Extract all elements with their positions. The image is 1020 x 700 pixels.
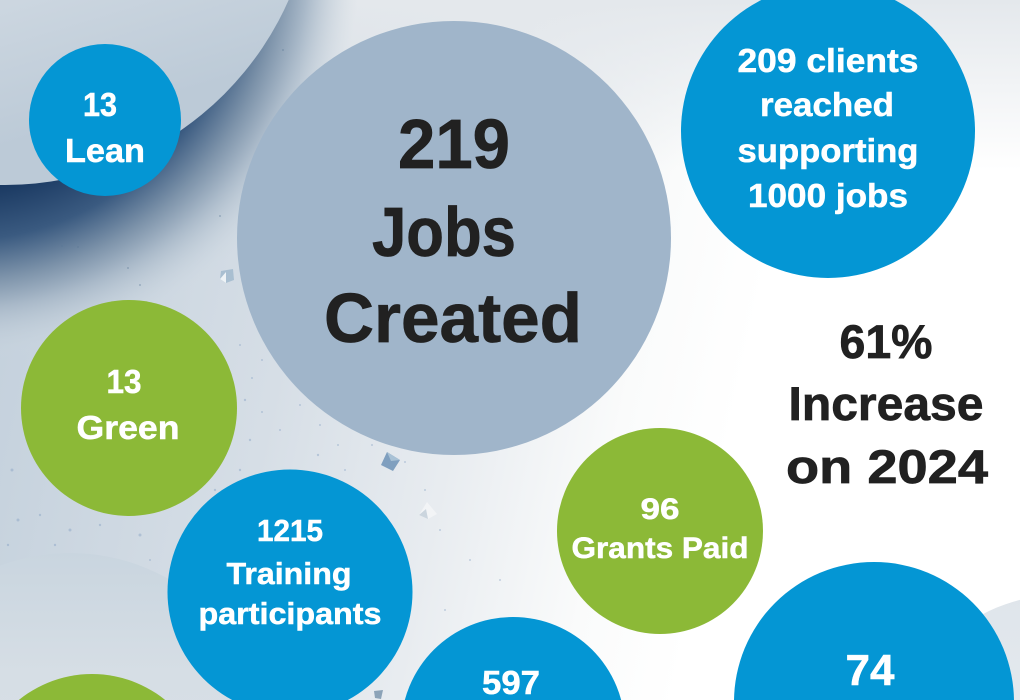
circle: 219 jobs created: Jobs: [372, 193, 516, 271]
circle: 1215 training participants: Training: [226, 556, 352, 591]
circle: 13 lean: [29, 44, 181, 196]
circle: 597: [401, 617, 625, 700]
circle: 96 grants paid: 96: [640, 493, 680, 526]
circle: 74: 74: [846, 646, 895, 695]
callout: 61% increase on 2024: [786, 315, 988, 493]
icon: crystal shard bottom: [374, 690, 383, 699]
callout: 61% increase on 2024: Increase: [788, 377, 984, 430]
circle: 1215 training participants: [168, 470, 412, 700]
circle: 13 green: Green: [76, 409, 180, 446]
circle: 597: 597: [482, 664, 540, 700]
icon: crystal shard middle: [381, 452, 400, 471]
circle: 209 clients reached: supporting: [738, 132, 918, 169]
circle: 219 jobs created: Created: [324, 279, 582, 357]
circle: 209 clients reached: 209 clients: [738, 42, 918, 79]
circle: 219 jobs created: [237, 21, 671, 455]
icon: crystal shard lower: [419, 502, 437, 519]
circle: 219 jobs created: 219: [398, 105, 510, 183]
circle: 209 clients reached: reached: [760, 86, 894, 123]
circle: 13 green: 13: [106, 363, 142, 400]
circle: 209 clients reached: 1000 jobs: [748, 177, 908, 214]
circle: 1215 training participants: 1215: [257, 513, 323, 548]
circle: 74: [734, 562, 1014, 700]
circle: 1215 training participants: participants: [198, 596, 382, 631]
circle: 209 clients reached: [681, 0, 975, 278]
circle: bottom-left green: [0, 674, 208, 700]
callout: 61% increase on 2024: 61%: [840, 315, 932, 368]
circle: 13 lean: Lean: [65, 132, 145, 169]
circle: 13 lean: 13: [83, 86, 117, 123]
circle: 96 grants paid: Grants Paid: [572, 532, 748, 565]
icon: crystal shard upper: [220, 269, 234, 283]
callout: 61% increase on 2024: on 2024: [786, 440, 988, 493]
circle: 13 green: [21, 300, 237, 516]
circle: 96 grants paid: [557, 428, 763, 634]
